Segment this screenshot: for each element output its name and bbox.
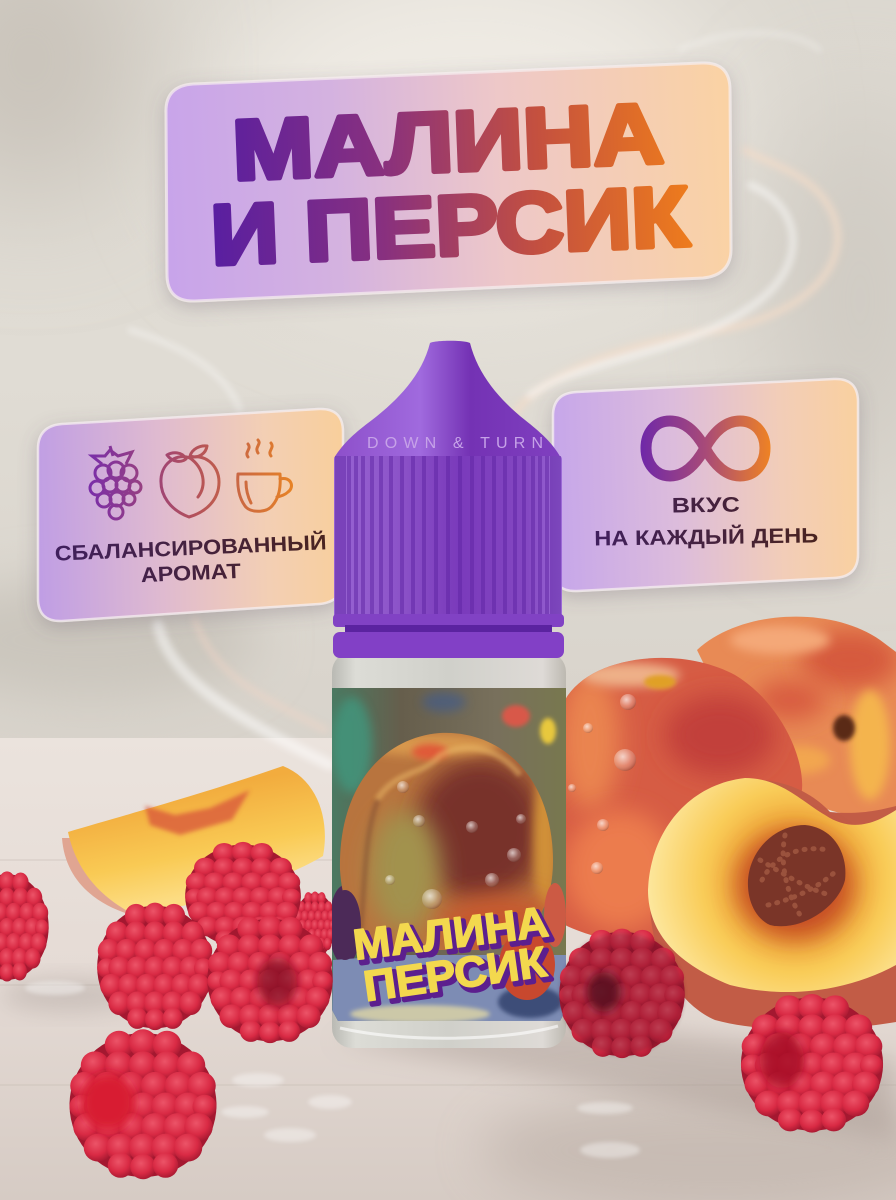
raspberry: beside bottle xyxy=(559,929,685,1058)
left panel: balanced aroma xyxy=(38,409,343,621)
water drops on table xyxy=(25,981,640,1158)
bottle label text: МАЛИНА xyxy=(354,902,555,973)
icon: peach xyxy=(161,446,219,517)
title text: МАЛИНА xyxy=(231,86,665,199)
raspberry: far left xyxy=(0,871,49,982)
right panel: taste for every day xyxy=(553,379,858,591)
glass base highlight xyxy=(340,1026,558,1038)
cap embossed text: DOWN & TURN xyxy=(367,435,543,452)
label: balanced aroma: АРОМАТ xyxy=(140,560,241,587)
icon: raspberry xyxy=(90,446,141,519)
bottle cap cone xyxy=(334,341,561,458)
label: balanced aroma: СБАЛАНСИРОВАННЫЙ xyxy=(54,530,327,566)
smoke wisps xyxy=(130,33,838,765)
bottle label text: ПЕРСИК xyxy=(364,941,554,1015)
title panel xyxy=(166,63,731,301)
main peach xyxy=(566,658,802,942)
raspberry: cluster front xyxy=(207,916,333,1043)
label: taste for every day: ВКУС xyxy=(672,494,740,517)
raspberry: cluster left xyxy=(97,903,213,1030)
icon: steaming cup xyxy=(238,440,291,511)
bottle label text: МАЛИНА xyxy=(351,898,551,970)
cap collars xyxy=(333,614,564,658)
raspberry: behind cluster xyxy=(294,892,336,958)
raspberry: cluster top xyxy=(185,842,301,949)
bottle label text xyxy=(354,907,555,1007)
peach slice xyxy=(62,766,325,916)
bottle label xyxy=(329,686,568,1024)
label: taste for every day: НА КАЖДЫЙ ДЕНЬ xyxy=(594,523,818,551)
ribbed cap xyxy=(334,456,562,618)
peach half xyxy=(648,778,896,1030)
peach pit xyxy=(735,825,855,941)
bottle label text: ПЕРСИК xyxy=(361,938,550,1011)
label: taste for every day xyxy=(594,492,818,551)
glass body xyxy=(332,652,566,1048)
raspberry: bottom right xyxy=(741,994,883,1133)
raspberry: bottom left xyxy=(70,1029,216,1179)
title text xyxy=(206,85,691,284)
title text: И ПЕРСИК xyxy=(209,169,691,284)
label: balanced aroma xyxy=(54,530,328,591)
icon: infinity xyxy=(646,421,765,476)
bottle xyxy=(329,341,568,1048)
back peach xyxy=(697,616,896,813)
